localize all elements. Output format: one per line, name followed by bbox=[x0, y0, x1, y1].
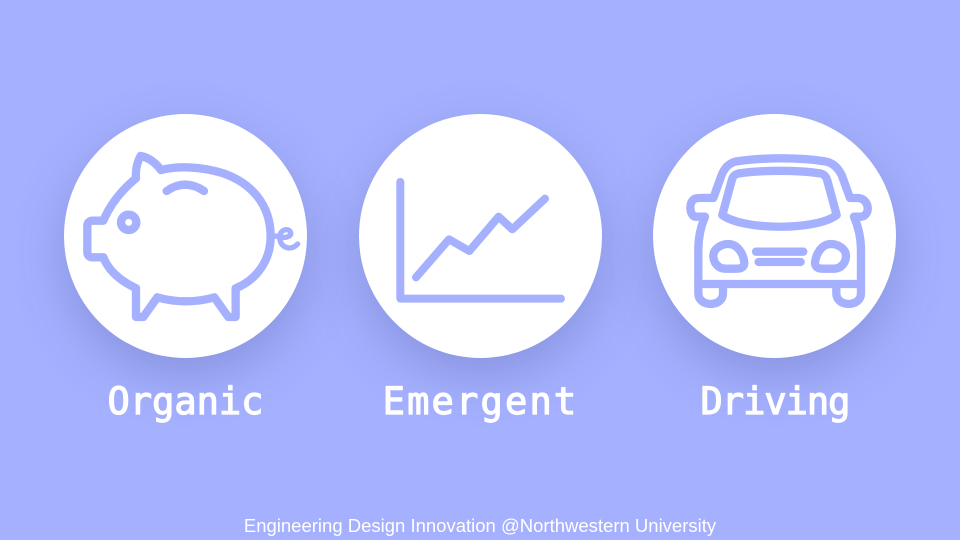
circle: driving bbox=[653, 114, 896, 358]
icon: car bbox=[690, 158, 868, 304]
label: Driving: Driving bbox=[701, 380, 849, 423]
footer: Engineering Design Innovation @Northwestern University bbox=[244, 515, 716, 536]
icon: piggy bank bbox=[87, 156, 298, 317]
icon: line chart bbox=[400, 182, 561, 299]
circle: emergent bbox=[358, 114, 602, 358]
circle: organic bbox=[64, 114, 307, 358]
label: Organic: Organic bbox=[108, 380, 263, 423]
label: Emergent: Emergent bbox=[383, 380, 578, 423]
